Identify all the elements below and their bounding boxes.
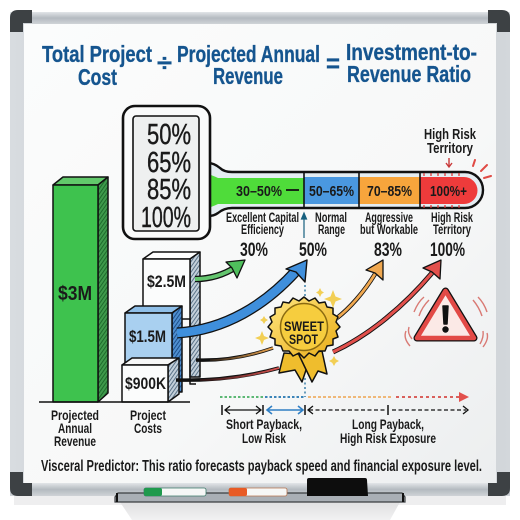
digital display: 65% xyxy=(147,147,191,179)
bar: $900K: $900K xyxy=(125,374,167,393)
digital display: 85% xyxy=(147,174,191,206)
bar axis labels: Project xyxy=(130,407,166,423)
bar axis labels: Annual xyxy=(58,420,92,436)
high risk callout: High Risk xyxy=(424,127,477,143)
bar: $900K xyxy=(122,358,179,402)
zone labels: but Workable xyxy=(360,222,418,237)
title formula xyxy=(42,39,477,90)
zone labels: Efficiency xyxy=(241,222,284,237)
high risk callout: Territory xyxy=(427,141,473,157)
sparkles xyxy=(255,288,342,366)
bar axis labels: Costs xyxy=(134,420,162,436)
payback labels: Low Risk xyxy=(242,430,286,446)
ratio percentages xyxy=(240,240,465,261)
chart baseline xyxy=(39,401,190,403)
ratio percentages: 50% xyxy=(299,240,327,261)
payback labels: Short Payback, xyxy=(226,416,302,432)
orange marker xyxy=(229,488,287,496)
title formula: Revenue xyxy=(213,63,283,89)
bar: $2.5M: $2.5M xyxy=(147,272,186,291)
title formula: Investment-to- xyxy=(346,39,477,65)
sweet spot badge xyxy=(268,297,340,382)
ratio percentages: 100% xyxy=(430,240,465,261)
dotted guide line at 50% xyxy=(304,285,306,397)
bar axis labels xyxy=(51,407,166,449)
icon: warning triangle xyxy=(405,291,488,347)
sweet spot badge: SWEET xyxy=(284,319,325,334)
payback range arrows xyxy=(222,405,468,415)
green marker xyxy=(144,488,206,496)
ratio percentages: 83% xyxy=(374,240,402,261)
thermometer tube xyxy=(208,163,483,216)
arrow: red to 100% xyxy=(176,260,441,380)
thermometer tube: 30–50% xyxy=(236,183,282,200)
title formula: Total Project xyxy=(42,41,152,67)
eraser xyxy=(307,478,368,496)
title formula: = xyxy=(326,48,340,78)
digital display: 100% xyxy=(141,202,191,234)
thermometer tube: 100%+ xyxy=(430,183,467,200)
ratio percentages: 30% xyxy=(240,240,268,261)
arrow: green to 30% xyxy=(195,260,245,279)
zone labels: Excellent Capital xyxy=(226,210,299,225)
title formula: Projected Annual xyxy=(177,41,320,67)
digital display xyxy=(123,106,210,239)
payback timeline xyxy=(220,392,469,402)
title formula: Revenue Ratio xyxy=(347,61,471,87)
zone labels: Territory xyxy=(433,222,471,237)
zone labels: High Risk xyxy=(431,210,473,225)
zone labels: Aggressive xyxy=(365,210,413,225)
bar: projected annual revenue xyxy=(53,177,108,402)
high risk callout xyxy=(424,127,491,178)
wall shadow xyxy=(14,496,506,520)
digital display: 50% xyxy=(147,119,191,151)
title formula: ÷ xyxy=(157,50,172,77)
zone labels xyxy=(226,210,473,238)
arrow: orange to 83% xyxy=(196,260,383,360)
bar: projected annual revenue: $3M xyxy=(58,283,92,305)
zone labels: Normal xyxy=(315,210,347,225)
title formula: Cost xyxy=(78,64,117,90)
bar: $2.5M xyxy=(143,252,200,384)
bar: $1.5M: $1.5M xyxy=(129,327,166,346)
thermometer tube: 50–65% xyxy=(309,183,354,200)
sweet spot badge: SPOT xyxy=(289,332,319,347)
bar axis labels: Projected xyxy=(51,407,99,423)
zone labels: Range xyxy=(318,222,345,237)
bar: $1.5M xyxy=(125,306,182,392)
payback labels xyxy=(226,416,436,446)
payback labels: Long Payback, xyxy=(352,416,424,432)
marker tray xyxy=(115,493,405,502)
thermometer tube: 70–85% xyxy=(367,183,412,200)
payback labels: High Risk Exposure xyxy=(340,430,436,446)
arrow: blue to 50% xyxy=(177,260,307,333)
bar axis labels: Revenue xyxy=(54,433,96,449)
